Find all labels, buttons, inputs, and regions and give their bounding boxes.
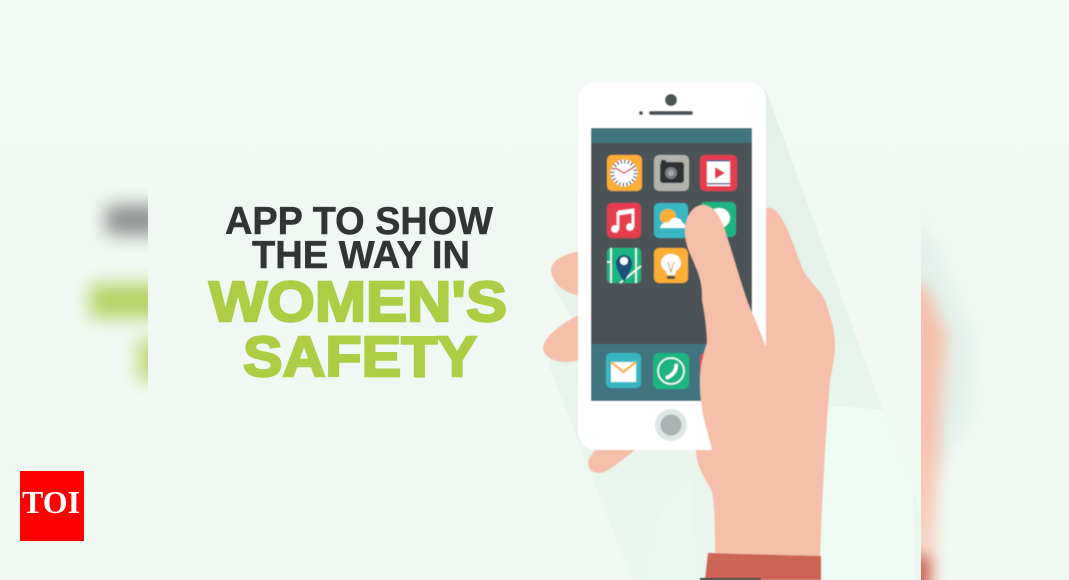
headline: SAFETY [243, 325, 477, 389]
center panel background [148, 0, 921, 580]
icon: light bulb [654, 248, 688, 283]
headline: WOMEN'S [209, 270, 507, 334]
illustration: hand holding phone [543, 82, 835, 580]
icon: weather [654, 203, 688, 238]
hand and pointing finger [685, 205, 835, 556]
icon: music [607, 203, 641, 238]
home button [655, 409, 687, 441]
headline: APP TO SHOW [225, 200, 493, 243]
wrist band [705, 553, 821, 580]
fingers behind phone [543, 251, 636, 473]
icon: map [607, 248, 641, 283]
icon: phone call [653, 353, 689, 389]
icon: camera [654, 155, 689, 191]
phone speaker and camera [639, 94, 693, 115]
headline: THE WAY IN [252, 234, 470, 277]
icon: video player [700, 155, 737, 191]
watch strap [700, 578, 762, 580]
TOI logo [20, 471, 84, 541]
headline [209, 200, 507, 389]
phone screen [591, 128, 752, 401]
phone body [578, 82, 766, 450]
icon: messages [700, 202, 736, 237]
phone shadow [548, 90, 921, 580]
TOI logo: TOI [22, 484, 80, 520]
icon: red dock app [700, 353, 720, 389]
icon: mail [606, 353, 641, 388]
icon: clock [607, 155, 642, 191]
